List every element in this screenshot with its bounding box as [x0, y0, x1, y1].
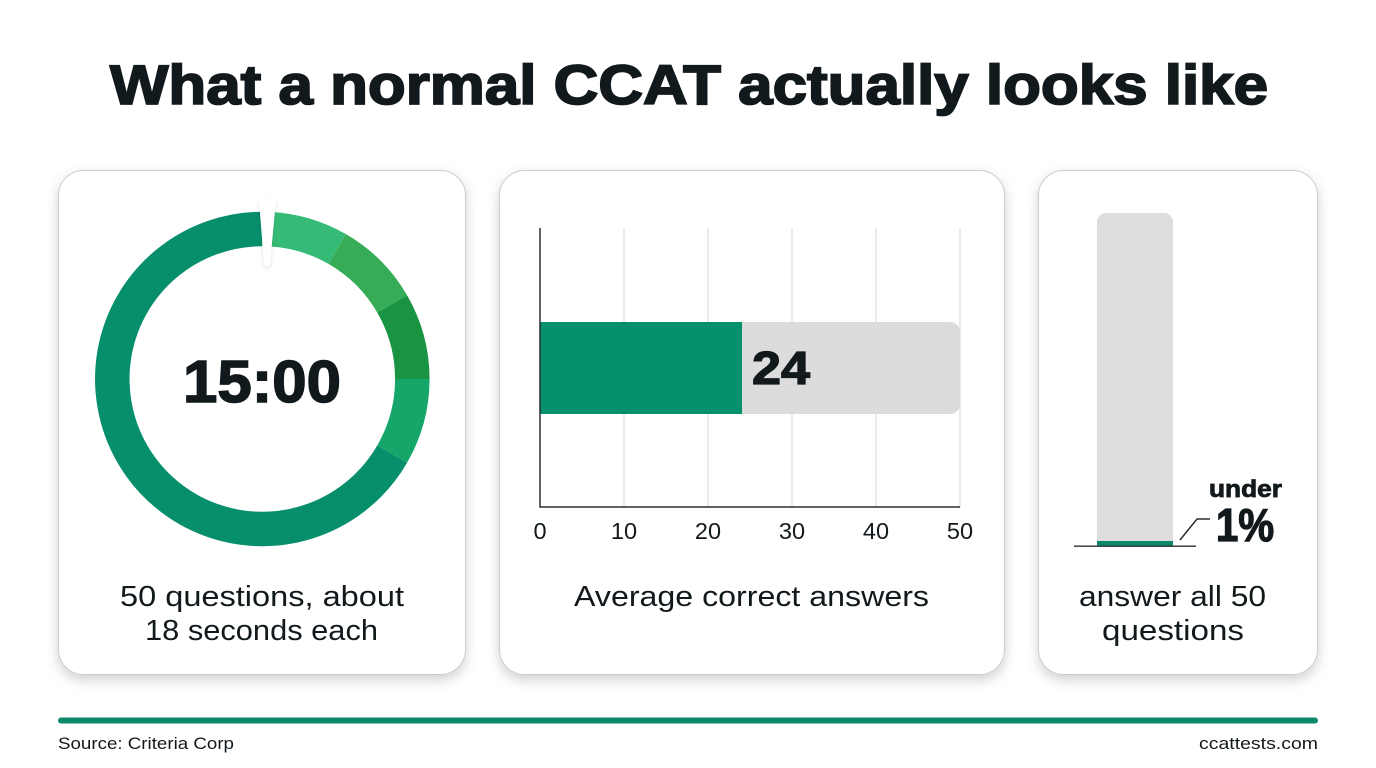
- axis labels: 40: [863, 518, 889, 544]
- card background: timer: [58, 170, 466, 674]
- card background: answer all: [1038, 170, 1318, 674]
- bar track: [540, 322, 960, 414]
- card background: average: [500, 170, 1004, 674]
- timer value: 15:00: [183, 349, 341, 415]
- axis labels: 30: [779, 518, 805, 544]
- tall bar fill: [1097, 541, 1173, 546]
- callout value: 1%: [1216, 499, 1274, 551]
- axis labels: 10: [611, 518, 637, 544]
- panel: timer: [58, 170, 466, 674]
- timer caption: [120, 581, 404, 647]
- panel: average correct answers: [500, 170, 1004, 674]
- title: What a normal CCAT actually looks like: [110, 53, 1268, 116]
- bar fill: [540, 322, 742, 414]
- callout under: under: [1209, 476, 1282, 503]
- source text: Source: Criteria Corp: [58, 735, 234, 753]
- timer needle: [259, 198, 276, 266]
- donut timer ring: [112, 229, 412, 529]
- axis labels: [533, 518, 973, 544]
- tall bar track: [1097, 213, 1173, 546]
- timer caption: 18 seconds each: [145, 615, 378, 647]
- bar value: 24: [752, 342, 810, 394]
- footer rule: [58, 718, 1318, 724]
- panel caption: answer all 50: [1079, 581, 1266, 613]
- panel caption: [1079, 581, 1266, 647]
- panel caption: questions: [1102, 615, 1244, 647]
- chart axes: [540, 228, 960, 507]
- leader line: [1180, 519, 1210, 540]
- timer caption: 50 questions, about: [120, 581, 404, 613]
- baseline: [1074, 545, 1196, 547]
- panel: answer all questions: [1038, 170, 1318, 674]
- axis labels: 0: [533, 518, 547, 544]
- site text: ccattests.com: [1199, 735, 1318, 753]
- axis labels: 20: [695, 518, 721, 544]
- chart caption: Average correct answers: [574, 581, 929, 613]
- axis labels: 50: [947, 518, 973, 544]
